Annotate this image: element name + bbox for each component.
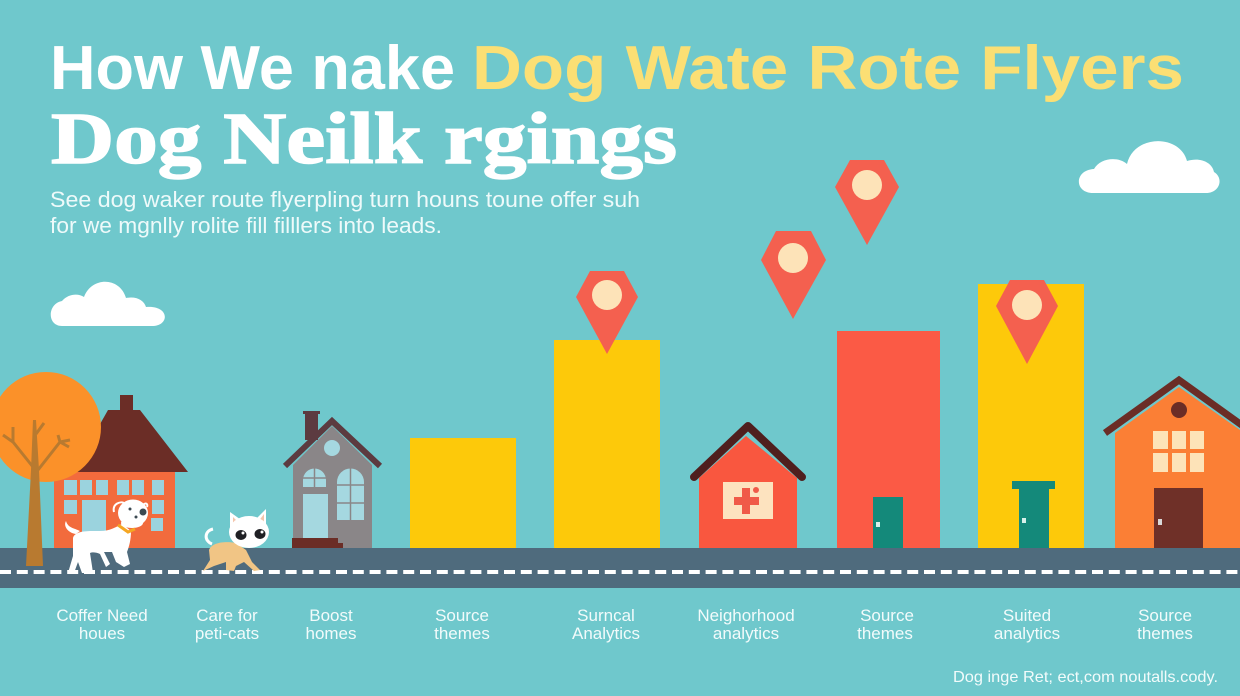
house: red clinic: [694, 426, 802, 548]
label 4: themes: [434, 624, 490, 643]
road: [0, 548, 1240, 588]
subtitle: See dog waker route flyerpling turn houns toune offer suh: [50, 187, 640, 212]
title: Dog Wate Rote Flyers: [472, 34, 1184, 103]
pin 1: [576, 271, 638, 354]
dog: [65, 500, 148, 573]
bar: yellow 1: [410, 438, 516, 548]
label 5: Analytics: [572, 624, 640, 643]
tree: [0, 372, 101, 566]
cat: [203, 509, 269, 571]
bar: yellow 2: [554, 340, 660, 548]
pin 4: [996, 280, 1058, 364]
label 4: Source: [435, 606, 489, 625]
bar: yellow 3 with door: [978, 284, 1084, 548]
label 1: houes: [79, 624, 125, 643]
footer note: Dog inge Ret; ect,com noutalls.cody.: [953, 669, 1218, 686]
house: orange with dark roof: [54, 395, 188, 548]
label 3: Boost: [309, 606, 353, 625]
subtitle: for we mgnlly rolite fill filllers into leads.: [50, 213, 442, 238]
house: orange right: [1105, 380, 1240, 548]
cloud: left: [51, 282, 165, 326]
subtitle: [50, 187, 640, 238]
pin 3: [835, 160, 899, 245]
title: Dog Neilk rgings: [51, 98, 677, 179]
label 9: Source: [1138, 606, 1192, 625]
label 2: peti-cats: [195, 624, 259, 643]
bar: red with door: [837, 331, 940, 548]
title: How We nake: [50, 34, 455, 103]
house: grey: [285, 411, 380, 548]
label 2: Care for: [196, 606, 258, 625]
label 6: analytics: [713, 624, 779, 643]
step labels: [56, 606, 1193, 643]
label 6: Neighorhood: [697, 606, 795, 625]
label 7: Source: [860, 606, 914, 625]
cloud: top right: [1079, 141, 1220, 193]
label 5: Surncal: [577, 606, 635, 625]
label 1: Coffer Need: [56, 606, 148, 625]
label 8: Suited: [1003, 606, 1051, 625]
label 8: analytics: [994, 624, 1060, 643]
pin 2: [761, 231, 826, 319]
label 7: themes: [857, 624, 913, 643]
label 3: homes: [305, 624, 357, 643]
title: [50, 34, 1184, 179]
label 9: themes: [1137, 624, 1193, 643]
